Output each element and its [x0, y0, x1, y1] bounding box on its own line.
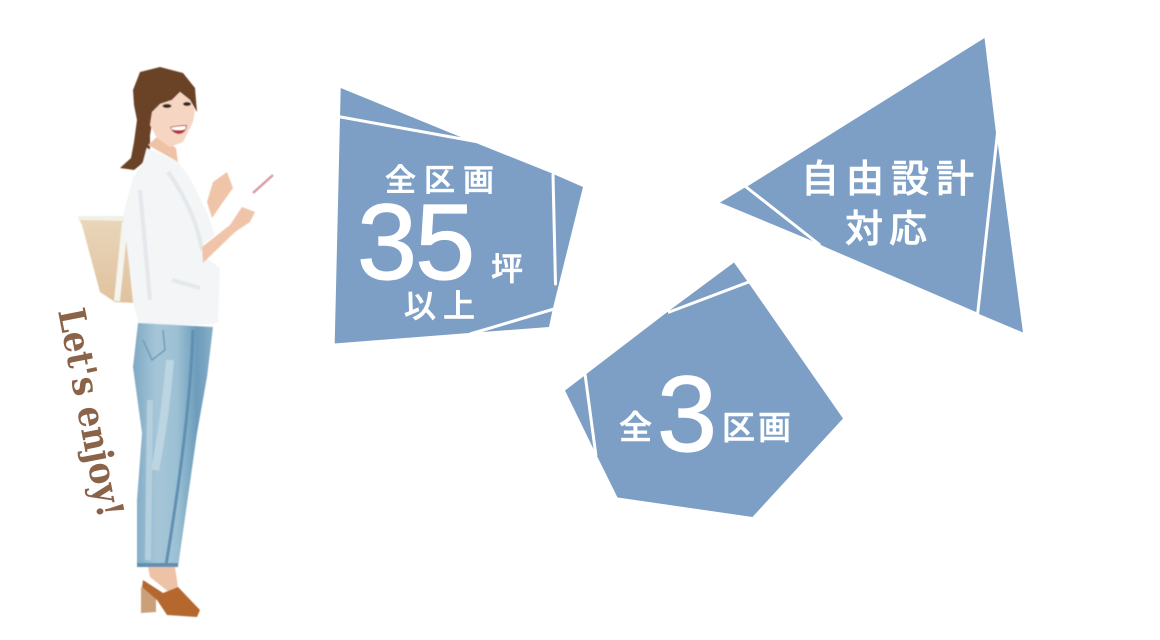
jeans [133, 323, 213, 567]
shape: panel 1 polygon [335, 88, 583, 344]
eyes and smile [162, 102, 191, 134]
shape: panel 2 polygon [720, 38, 1023, 332]
blouse [123, 148, 220, 327]
sandals [141, 580, 200, 617]
hair [120, 67, 197, 170]
text: Let's enjoy!: Let's enjoy! [49, 304, 133, 521]
neck and face [148, 136, 178, 162]
shape: panel 3 polygon [565, 262, 843, 517]
decorative cut lines: panel 2 [746, 133, 998, 315]
number: 35: 35 [357, 181, 473, 302]
panel: free design [720, 38, 1023, 332]
decorative cut lines: panel 3 [585, 282, 750, 456]
ankle [148, 567, 178, 593]
text: plots: 区画 [722, 409, 794, 446]
text: or more: 以上 [404, 288, 482, 324]
illustration: woman with tote bag and smartphone [78, 67, 273, 617]
text: tsubo: 坪 [491, 251, 523, 287]
text: free design: 自由設計 [801, 159, 981, 201]
number: 3: 3 [657, 353, 717, 474]
decorative cut lines: panel 1 [338, 116, 556, 334]
panel: 35 tsubo plots [335, 88, 583, 344]
text: total: 全 [619, 409, 652, 446]
bag [78, 216, 135, 303]
panel: 3 plots total [565, 262, 843, 517]
text: all plots: 全区画 [385, 163, 502, 198]
smartphone [253, 175, 273, 193]
arms and hands [202, 172, 255, 263]
text: supported: 対応 [845, 209, 933, 251]
